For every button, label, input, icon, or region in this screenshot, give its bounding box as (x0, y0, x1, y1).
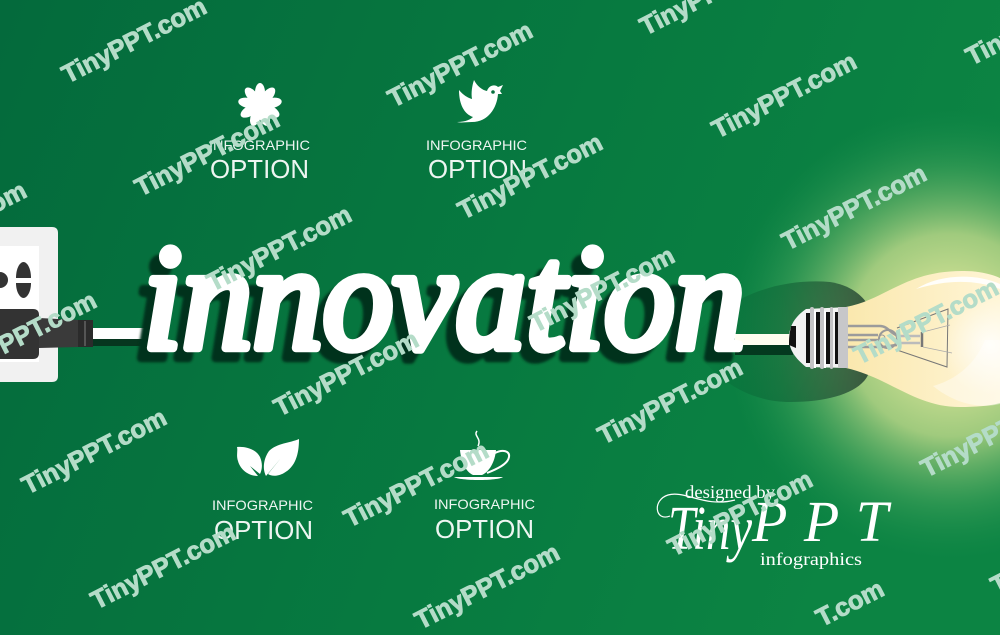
text: Tiny: Tiny (668, 495, 752, 563)
text: option 2 heading: OPTION (428, 154, 527, 184)
text: PPT: PPT (751, 489, 892, 554)
wire left (93, 328, 153, 346)
text: designed by: designed by (685, 482, 775, 502)
panel: option 2 (426, 80, 527, 184)
panel: option 4 (434, 431, 535, 544)
watermarks: T.com (812, 575, 889, 633)
text: option 3 heading: OPTION (214, 515, 313, 545)
icon: flower (237, 83, 283, 127)
text: option 4 label: INFOGRAPHIC (434, 496, 535, 512)
title: innovation: innovation (143, 215, 745, 381)
cone shadow behind bulb (690, 281, 868, 402)
watermarks: TinyPPT.com (850, 273, 1000, 370)
watermarks: TinyPPT.com (778, 159, 931, 256)
text: option 2 label: INFOGRAPHIC (426, 137, 527, 153)
icon: bird (457, 80, 503, 122)
filament (848, 309, 952, 367)
watermarks: TinyPPT.com (594, 353, 747, 450)
flourish on the T (657, 494, 735, 517)
text: option 4 heading: OPTION (435, 514, 534, 544)
text: option 1 heading: OPTION (210, 154, 309, 184)
watermarks: TinyPPT.com (87, 518, 240, 615)
watermarks: TinyPPT.com (384, 16, 537, 113)
bulb glass (846, 271, 1000, 407)
text: infographics: infographics (760, 549, 862, 569)
watermarks: TinyPPT.com (708, 47, 861, 144)
bulb highlights (916, 277, 1000, 289)
watermarks: TinyPPT.com (454, 128, 607, 225)
watermarks: TinyPPT.com (203, 200, 356, 297)
icon: light bulb (789, 271, 1000, 407)
icon: black plug and cord (0, 309, 93, 359)
watermarks: TinyPPT.com (526, 241, 679, 338)
bulb base (789, 307, 848, 368)
panel: option 3 (212, 439, 313, 545)
watermarks: TinyPPT.com (18, 403, 171, 500)
logo: designed by TinyPPT (657, 482, 892, 569)
watermarks: TinyPPT.com (131, 105, 284, 202)
watermarks: TinyPPT.com (340, 436, 493, 533)
watermarks: TinyPPT.com (270, 325, 423, 422)
icon: leaves (237, 439, 299, 476)
text: option 3 label: INFOGRAPHIC (212, 497, 313, 513)
panel: option 1 (209, 83, 310, 184)
panel: wall socket (0, 227, 58, 382)
icon: coffee cup (454, 431, 509, 480)
title shadow: innovation: innovation (133, 225, 735, 391)
watermarks: TinyPPT.com (664, 465, 817, 562)
watermarks: TinyPPT.com (411, 538, 564, 635)
wire right (735, 334, 793, 355)
text: option 1 label: INFOGRAPHIC (209, 137, 310, 153)
